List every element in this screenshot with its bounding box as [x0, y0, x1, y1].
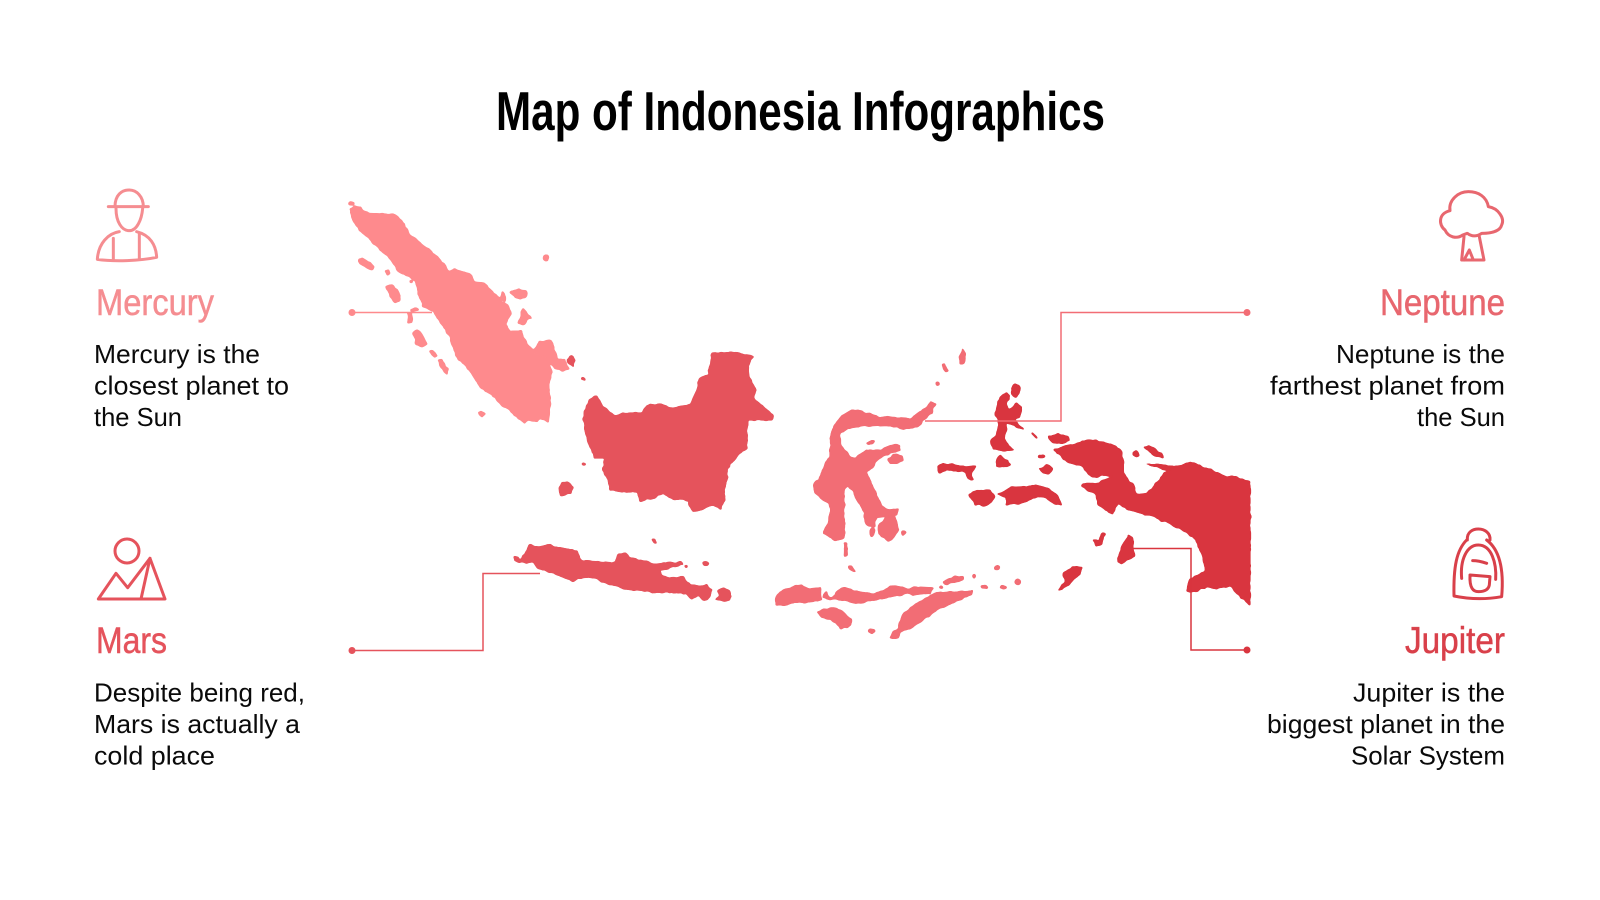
islands: Nusa Tenggara [775, 585, 933, 633]
island: Java [513, 463, 732, 601]
text: Mercury description: closest planet to [94, 370, 289, 400]
text: Mercury description [94, 339, 289, 432]
text: Jupiter description: Jupiter is the [1353, 678, 1505, 708]
connector: Mars [348, 574, 540, 654]
heading: Jupiter: Jupiter [1405, 620, 1505, 661]
text: Jupiter description: Solar System [1351, 740, 1505, 770]
region: Kalimantan and Java [513, 352, 773, 601]
text: Neptune description: the Sun [1417, 402, 1505, 432]
region: Sumatra [349, 202, 569, 423]
icon: mountain and sun [98, 539, 165, 599]
text: Mars description: Despite being red, [94, 678, 305, 708]
text: Neptune description [1270, 339, 1505, 432]
panel: Mars [94, 539, 305, 770]
text: Mercury description: the Sun [94, 402, 182, 432]
text: Mars description: Mars is actually a [94, 709, 301, 739]
heading: Neptune: Neptune [1380, 282, 1505, 323]
icon: farmer [97, 190, 157, 261]
icon: backpack [1454, 529, 1502, 599]
heading: Mercury: Mercury [96, 282, 214, 323]
text: Mars description: cold place [94, 740, 215, 770]
connector: Neptune [925, 309, 1250, 421]
island: Kalimantan [583, 352, 773, 512]
connector: Mercury [348, 309, 432, 316]
text: Neptune description: Neptune is the [1336, 339, 1505, 369]
islands: Belitung [567, 355, 585, 381]
title: Map of Indonesia Infographics [496, 80, 1105, 142]
panel: Mercury [94, 190, 289, 432]
panel: Jupiter [1267, 529, 1505, 770]
text: Neptune description: farthest planet from [1270, 370, 1505, 400]
connector: Jupiter [1133, 548, 1250, 654]
text: Jupiter description [1267, 678, 1505, 770]
map of Indonesia [349, 202, 1250, 638]
region: Maluku and Papua [938, 384, 1250, 605]
text: Mercury description: Mercury is the [94, 339, 260, 369]
text: Jupiter description: biggest planet in the [1267, 709, 1505, 739]
heading: Mars: Mars [96, 620, 167, 661]
icon: tree [1440, 192, 1503, 260]
text: Mars description [94, 678, 305, 770]
island: Sulawesi [813, 349, 1021, 638]
panel: Neptune [1270, 192, 1505, 432]
region: Sulawesi and Nusa Tenggara [775, 349, 1021, 638]
